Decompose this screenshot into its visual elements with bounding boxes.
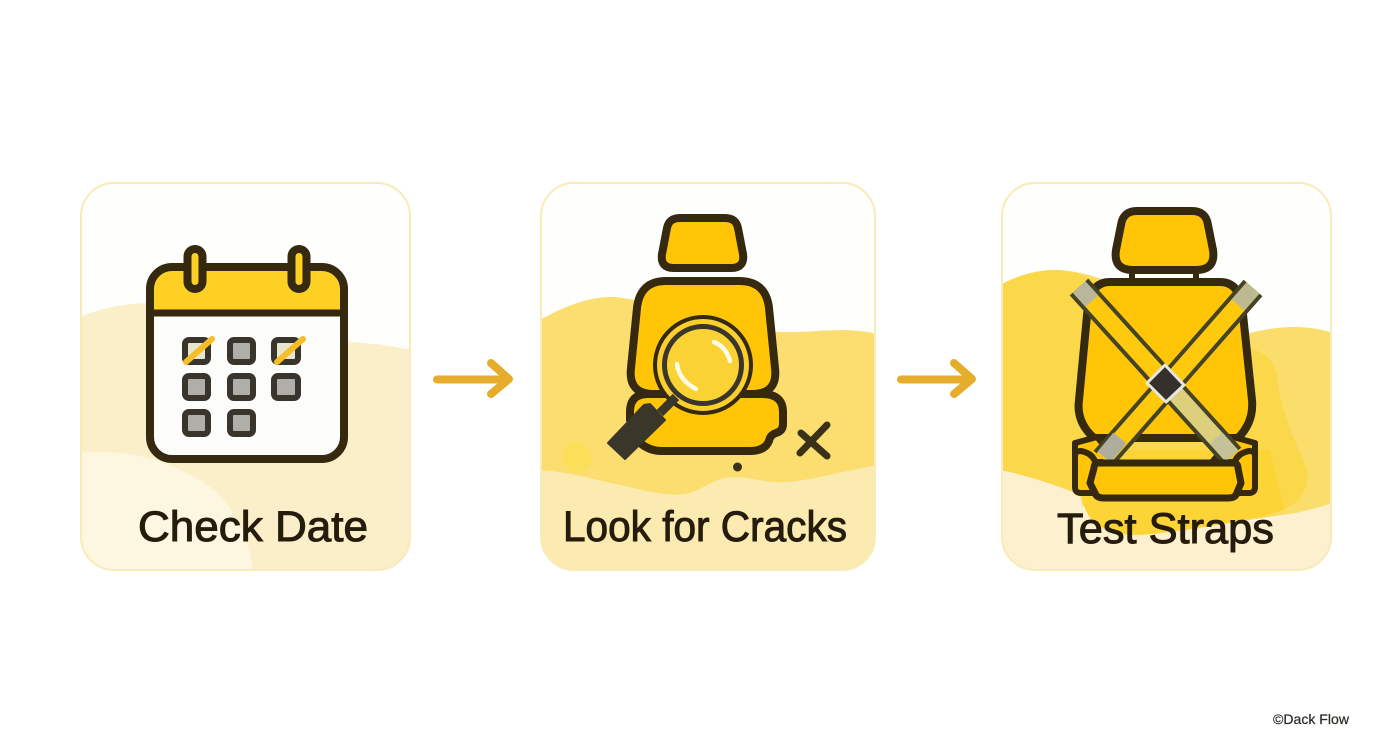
icon: x mark	[800, 425, 827, 456]
panel: look for cracks	[540, 183, 877, 572]
label: look for cracks: Look for Cracks	[563, 503, 847, 551]
icon: car seat with magnifier	[608, 218, 783, 459]
icon: buckle	[1147, 365, 1184, 402]
label: check date: Check Date	[138, 503, 368, 551]
icon: calendar	[150, 249, 344, 459]
label: test straps: Test Straps	[1057, 505, 1274, 553]
icon: car seat with straps	[1075, 211, 1255, 498]
arrow: step one to two	[437, 363, 509, 394]
arrow: step two to three	[901, 363, 972, 394]
panel: check date	[80, 183, 411, 572]
watermark: ©Dack Flow	[1273, 711, 1350, 727]
panel: test straps	[1000, 183, 1333, 572]
infographic: car seat inspection steps	[80, 182, 1350, 724]
icon: dot	[733, 462, 742, 472]
straps	[1079, 287, 1253, 459]
